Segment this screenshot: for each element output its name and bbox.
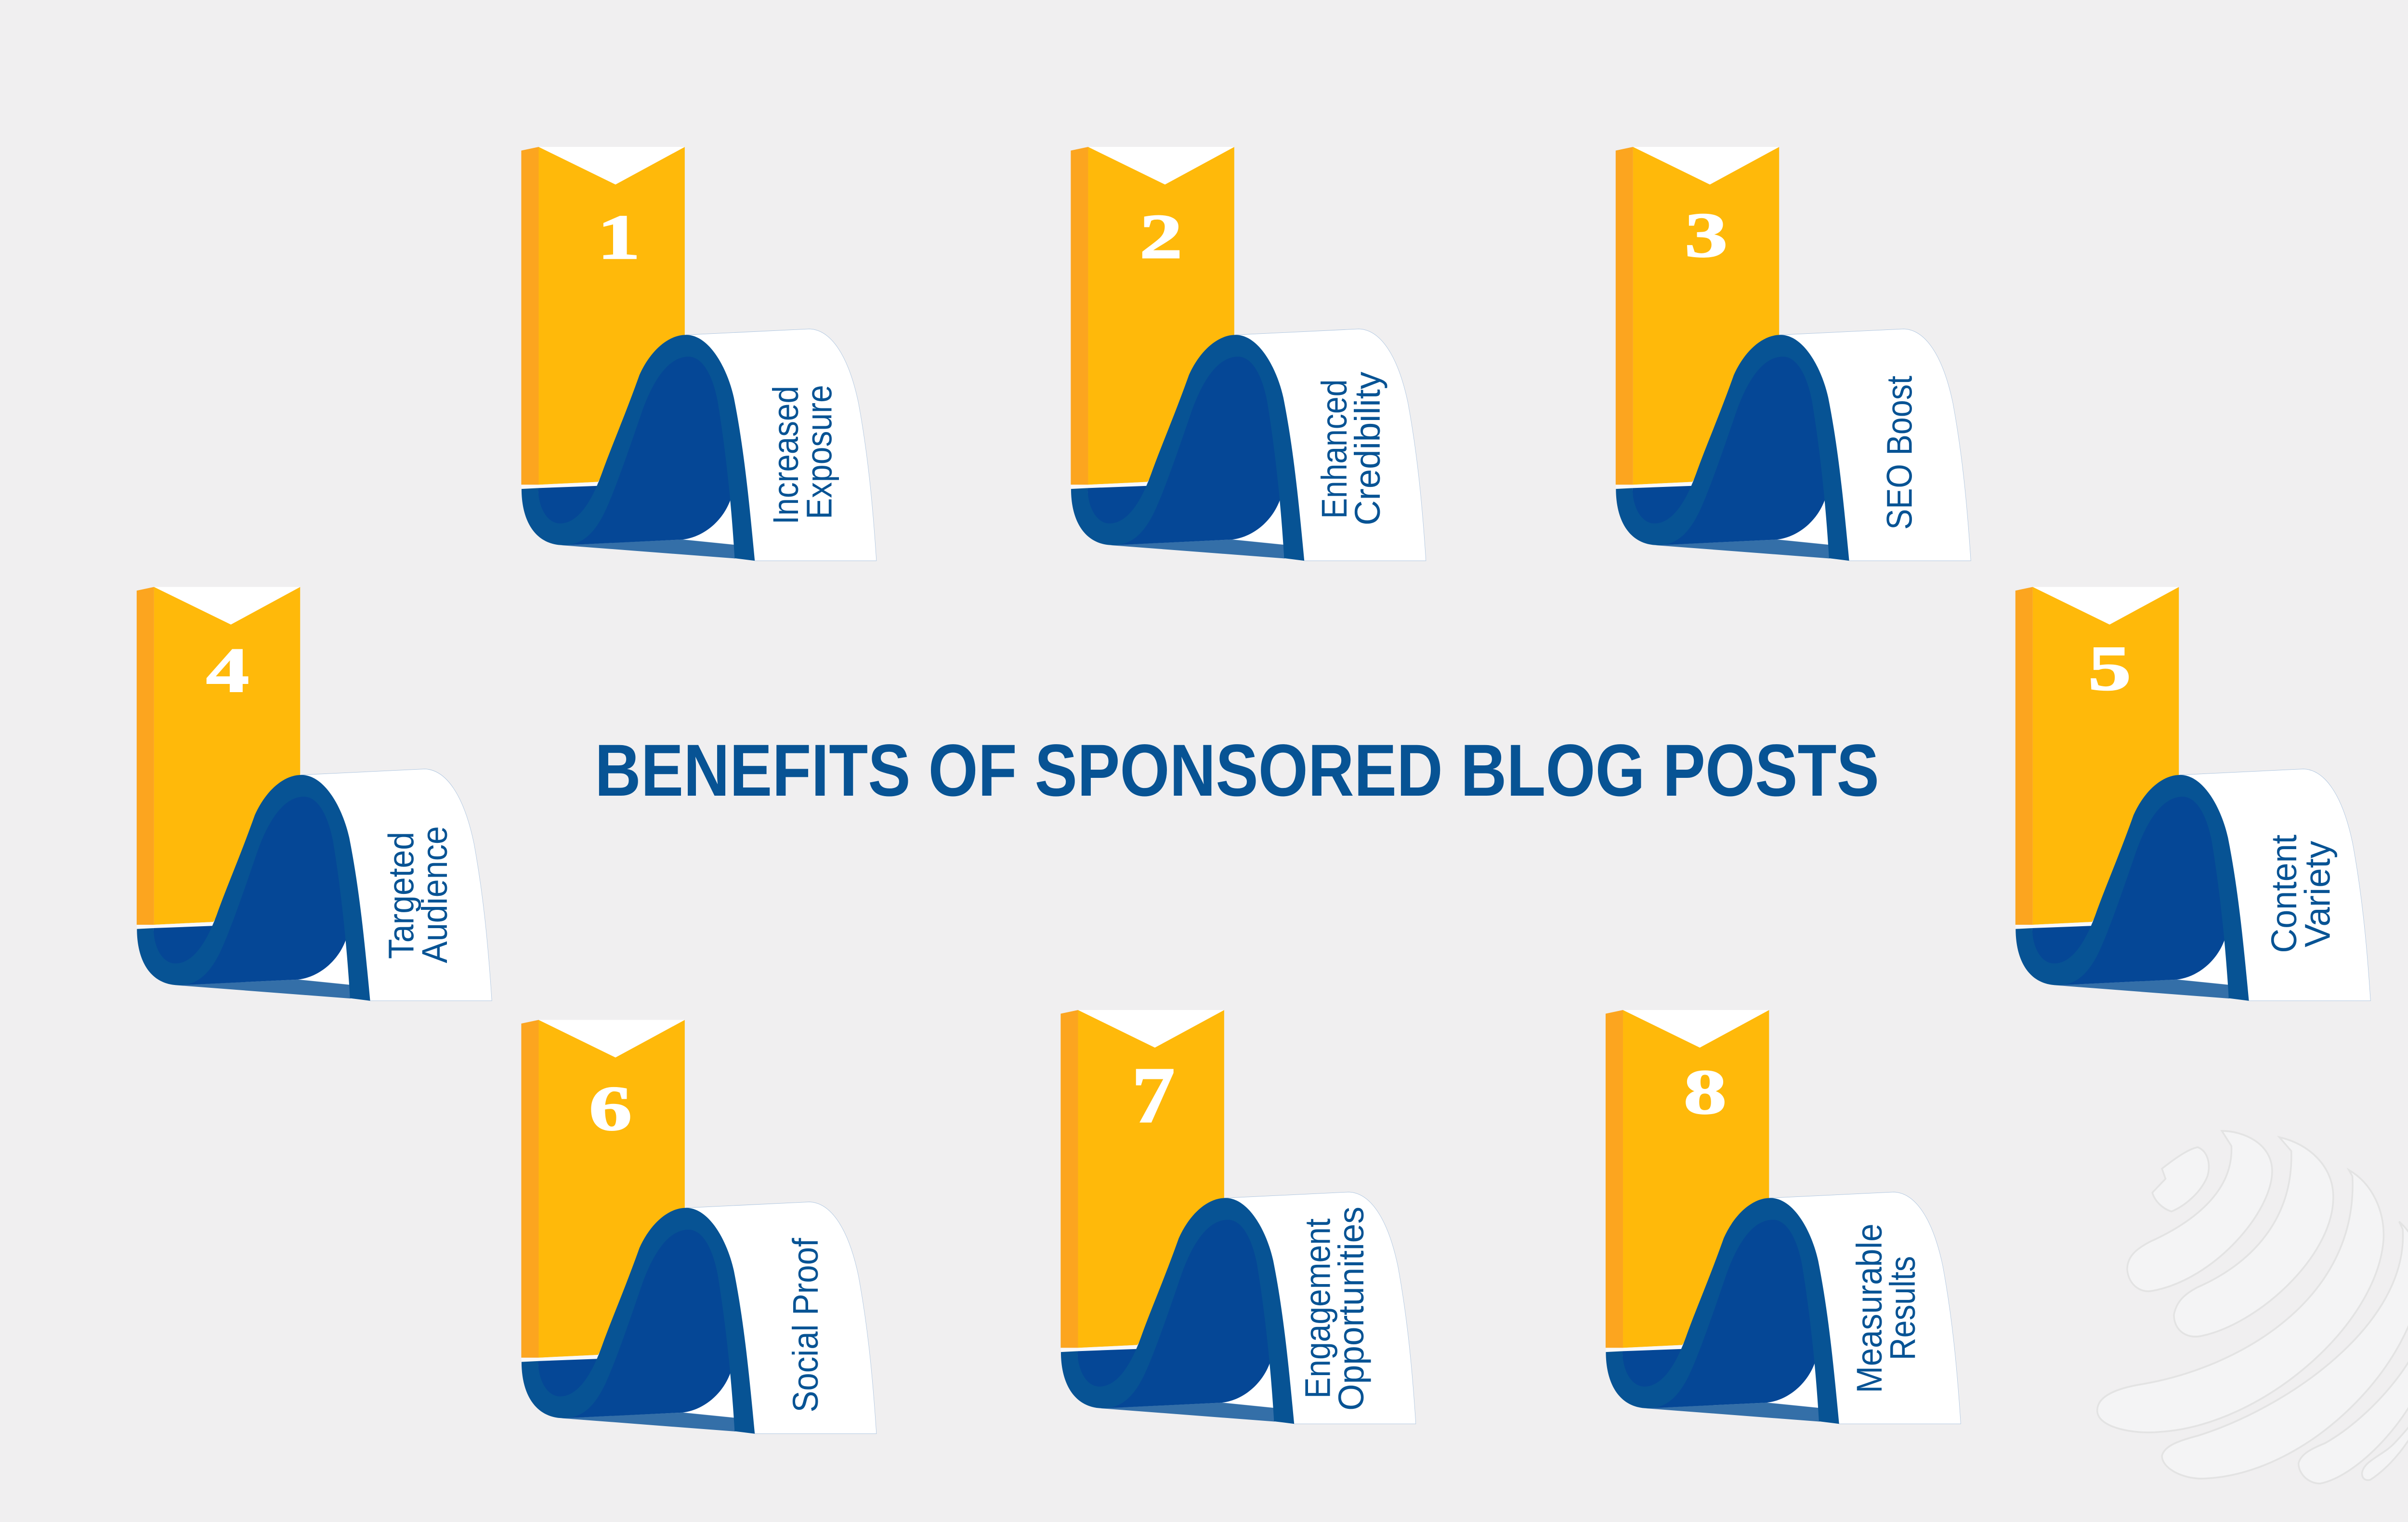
number 8: 8 <box>1684 1057 1727 1127</box>
label: Enhanced Credibility: Enhanced <box>1314 380 1354 519</box>
bookmark ribbon 4 <box>137 587 492 1001</box>
card 1: Increased Exposure <box>521 147 877 561</box>
bookmark ribbon 5 <box>2015 587 2370 1001</box>
number 5: 5 <box>2088 633 2131 703</box>
number 7: 7 <box>1132 1051 1175 1140</box>
label: Content Variety: Variety <box>2298 841 2338 947</box>
title: BENEFITS OF SPONSORED BLOG POSTS <box>595 729 1879 812</box>
label: Increased Exposure: Exposure <box>799 385 839 519</box>
label: Increased Exposure <box>766 385 839 525</box>
label: Engagement Opportunities: Opportunities <box>1331 1207 1371 1411</box>
card 3: SEO Boost <box>1616 147 1971 561</box>
label: Engagement Opportunities <box>1297 1207 1371 1411</box>
number 3: 3 <box>1685 199 1727 270</box>
bookmark ribbon 2 <box>1071 147 1426 561</box>
label: Content Variety <box>2264 834 2338 953</box>
card 4: Targeted Audience <box>137 587 492 1001</box>
label: Social Proof: Social Proof <box>785 1238 825 1412</box>
number 6: 6 <box>589 1073 632 1143</box>
bookmark ribbon 6 <box>521 1020 877 1434</box>
watermark globe logo <box>2097 1131 2408 1483</box>
number 1: 1 <box>597 202 640 272</box>
label: Measurable Results: Measurable <box>1849 1223 1889 1393</box>
label: Content Variety: Content <box>2264 834 2304 953</box>
label: Targeted Audience: Targeted <box>381 832 421 959</box>
label: Targeted Audience: Audience <box>415 826 455 963</box>
card 6: Social Proof <box>521 1020 877 1434</box>
label: Measurable Results: Results <box>1883 1256 1923 1360</box>
bookmark ribbon 8 <box>1606 1010 1961 1424</box>
number 4: 4 <box>206 635 249 705</box>
label: Enhanced Credibility: Credibility <box>1348 372 1387 525</box>
label: SEO Boost: SEO Boost <box>1879 376 1919 530</box>
label: Engagement Opportunities: Engagement <box>1297 1218 1338 1399</box>
card 8: Measurable Results <box>1606 1010 1961 1424</box>
label: Targeted Audience <box>381 826 455 963</box>
bookmark ribbon 1 <box>521 147 877 561</box>
number 2: 2 <box>1139 201 1182 272</box>
bookmark ribbon 3 <box>1616 147 1971 561</box>
bookmark ribbon 7 <box>1060 1010 1416 1424</box>
label: Increased Exposure: Increased <box>766 386 806 525</box>
card 7: Engagement Opportunities <box>1060 1010 1416 1424</box>
label: Enhanced Credibility <box>1314 372 1387 525</box>
label: Measurable Results <box>1849 1223 1923 1393</box>
card 5: Content Variety <box>2015 587 2370 1001</box>
card 2: Enhanced Credibility <box>1071 147 1426 561</box>
